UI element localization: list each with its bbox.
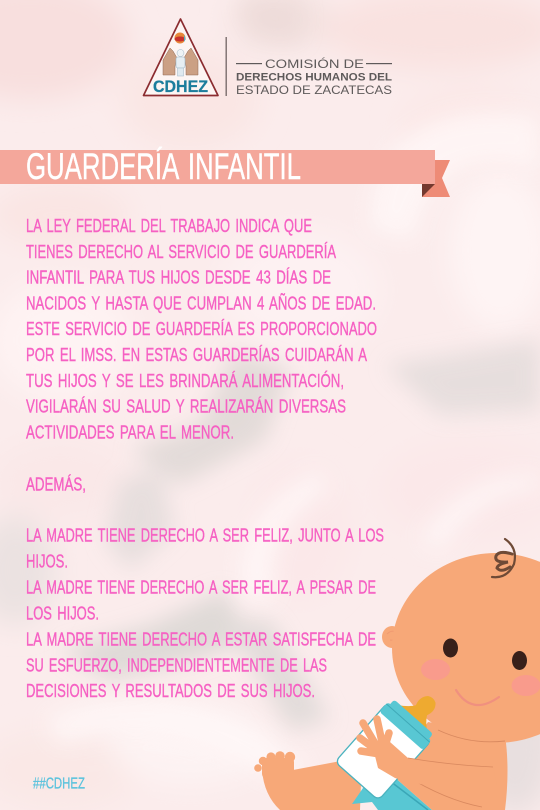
text block: ley federal: TIENES DERECHO AL SERVICIO DE GUARDERÍA (26, 241, 336, 262)
text block: ley federal: TUS HIJOS Y SE LES BRINDARÁ ALIMENTACIÓN, (26, 370, 344, 391)
text block: ley federal: ACTIVIDADES PARA EL MENOR. (26, 421, 234, 442)
title banner (0, 146, 450, 197)
baby arm and hand (360, 719, 497, 787)
commission name: ESTADO DE ZACATECAS (236, 83, 392, 97)
logo triangle (144, 19, 218, 96)
logo divider (226, 37, 227, 96)
ribbon tail (422, 160, 450, 197)
hashtag: ##CDHEZ (33, 776, 85, 792)
text block: derechos de la madre: LOS HIJOS. (26, 602, 99, 623)
bottle (335, 678, 453, 800)
text block: derechos de la madre: LA MADRE TIENE DERECHO A SER FELIZ, A PESAR DE (26, 576, 376, 597)
baby hair curl (492, 539, 515, 577)
logo emblem ball (174, 32, 186, 44)
logo: CDHEZ (144, 19, 392, 97)
ribbon fold (422, 184, 435, 197)
commission name: DERECHOS HUMANOS DEL (236, 72, 392, 84)
text block: derechos de la madre (26, 525, 384, 701)
title: GUARDERÍA INFANTIL (26, 146, 301, 187)
baby ear (382, 626, 402, 648)
text block: ley federal (26, 215, 377, 442)
baby diaper (352, 775, 432, 810)
text block: ley federal: INFANTIL PARA TUS HIJOS DESDE 43 DÍAS DE (26, 267, 331, 288)
text block: derechos de la madre: HIJOS. (26, 551, 68, 572)
text block: derechos de la madre: LA MADRE TIENE DERECHO A SER FELIZ, JUNTO A LOS (26, 525, 384, 546)
text: además: ADEMÁS, (26, 474, 86, 495)
text block: derechos de la madre: SU ESFUERZO, INDEPENDIENTEMENTE DE LAS (26, 654, 327, 675)
baby leg and foot (254, 751, 362, 810)
text block: ley federal: POR EL IMSS. EN ESTAS GUARDERÍAS CUIDARÁN A (26, 344, 367, 365)
logo wordmark CDHEZ: CDHEZ (153, 78, 208, 96)
bottle body (335, 702, 431, 800)
illustration: baby with bottle (254, 539, 540, 810)
text block: ley federal: NACIDOS Y HASTA QUE CUMPLAN 4 AÑOS DE EDAD. (26, 292, 376, 313)
text block: derechos de la madre: LA MADRE TIENE DERECHO A ESTAR SATISFECHA DE (26, 628, 376, 649)
commission name: COMISIÓN DE (265, 56, 364, 71)
baby body (392, 722, 508, 810)
text block: derechos de la madre: DECISIONES Y RESULTADOS DE SUS HIJOS. (26, 680, 315, 701)
bottle nipple (397, 684, 446, 731)
commission name (236, 56, 392, 97)
bottle cap (388, 699, 433, 741)
text block: ley federal: VIGILARÁN SU SALUD Y REALIZARÁN DIVERSAS (26, 396, 346, 417)
banner bar (0, 150, 435, 184)
neck crease (438, 730, 505, 742)
text block: ley federal: LA LEY FEDERAL DEL TRABAJO INDICA QUE (26, 215, 312, 236)
logo hands and figure (163, 48, 198, 76)
baby head (392, 553, 540, 743)
text block: ley federal: ESTE SERVICIO DE GUARDERÍA ES PROPORCIONADO (26, 318, 377, 339)
baby cheeks (421, 659, 450, 680)
baby eyes (443, 638, 458, 658)
baby smile (456, 690, 499, 705)
